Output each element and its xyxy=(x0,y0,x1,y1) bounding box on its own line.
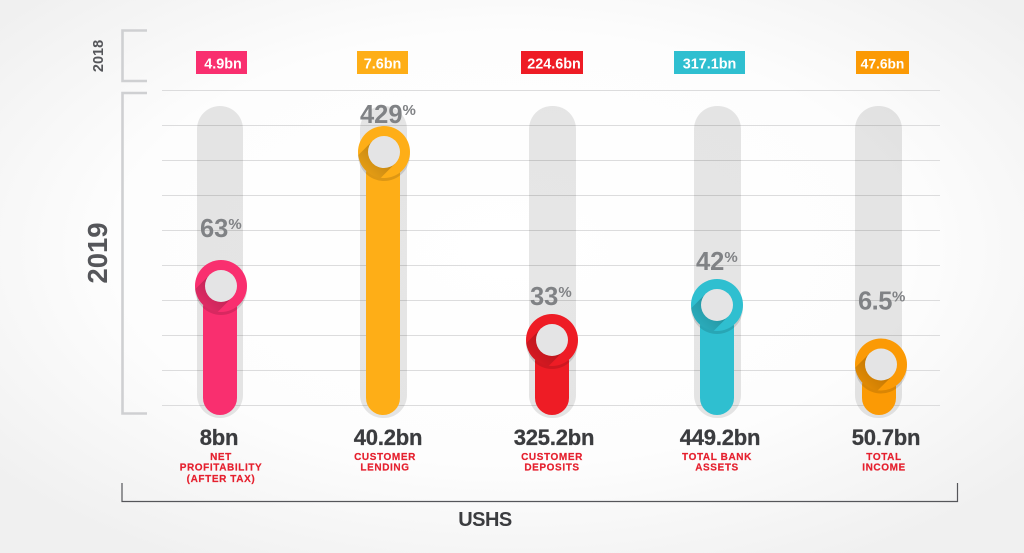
growth percent: 6.5 xyxy=(858,288,892,316)
axis bracket xyxy=(122,483,958,502)
2018 value badge xyxy=(521,51,583,74)
growth percent: 33 xyxy=(530,283,558,311)
metric label: DEPOSITS xyxy=(524,462,580,474)
metric label: (AFTER TAX) xyxy=(187,474,255,485)
bar track xyxy=(529,106,576,418)
column: customer deposits xyxy=(511,51,594,474)
2019 value: 8bn xyxy=(200,425,238,450)
growth percent: % xyxy=(228,216,242,233)
growth percent: % xyxy=(403,102,416,119)
bar xyxy=(862,369,896,415)
2019 value: 325.2bn xyxy=(514,425,594,450)
metric label: TOTAL xyxy=(866,452,902,463)
column: total income xyxy=(852,51,920,471)
bar xyxy=(700,309,734,415)
2019 bracket xyxy=(122,93,147,414)
2018 value badge: 317.1bn xyxy=(683,56,736,72)
bar track xyxy=(360,106,407,418)
metric label: CUSTOMER xyxy=(354,452,416,463)
growth percent: 63 xyxy=(200,215,228,243)
2018 value badge xyxy=(196,51,247,74)
growth percent: % xyxy=(724,249,738,266)
metric label: INCOME xyxy=(862,462,906,474)
bar xyxy=(366,156,400,415)
marker xyxy=(691,279,743,334)
bar track xyxy=(197,106,243,418)
metric label: NET xyxy=(210,452,232,463)
growth percent: % xyxy=(558,284,572,301)
axis title: USHS: USHS xyxy=(458,509,512,531)
2018 value badge: 7.6bn xyxy=(364,56,401,72)
2019 value: 50.7bn xyxy=(852,425,920,450)
marker xyxy=(855,338,907,394)
metric label: CUSTOMER xyxy=(521,452,583,463)
2018 value badge: 224.6bn xyxy=(527,56,581,72)
marker xyxy=(195,260,247,315)
column: total bank assets xyxy=(674,51,760,474)
2019 value: 449.2bn xyxy=(680,425,760,450)
metric label: LENDING xyxy=(360,462,410,474)
marker xyxy=(526,314,578,369)
metric label: PROFITABILITY xyxy=(180,462,262,474)
2018 value badge xyxy=(856,51,909,74)
2018 value badge xyxy=(357,51,408,74)
2018 year label: 2018 xyxy=(91,40,107,72)
column: net profitability xyxy=(180,51,262,485)
growth percent: 429 xyxy=(360,101,403,129)
2018 value badge: 47.6bn xyxy=(861,56,904,72)
2018 value badge xyxy=(674,51,745,74)
2019 year label: 2019 xyxy=(82,222,113,284)
column: customer lending xyxy=(354,51,422,471)
2019 value: 40.2bn xyxy=(354,425,422,450)
bar xyxy=(535,344,569,415)
growth percent: % xyxy=(892,288,905,306)
bar xyxy=(203,290,237,415)
2018 bracket xyxy=(122,30,147,81)
metric label: ASSETS xyxy=(695,462,739,474)
growth percent: 42 xyxy=(696,248,724,276)
bar track xyxy=(694,106,741,418)
metric label: TOTAL BANK xyxy=(682,452,752,463)
bar track xyxy=(855,106,902,418)
2018 value badge: 4.9bn xyxy=(204,56,242,72)
marker xyxy=(358,126,410,181)
